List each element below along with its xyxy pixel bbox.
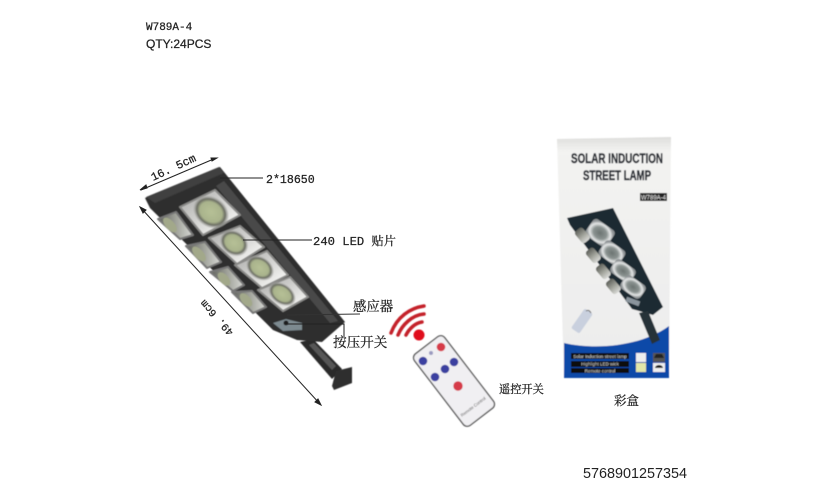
width dimension arrow [140, 158, 217, 190]
press switch label: 按压开关 [333, 334, 388, 350]
remote body [412, 334, 496, 428]
length dimension arrow [140, 207, 321, 405]
lamp body [145, 167, 345, 342]
remote buttons [419, 343, 463, 391]
box feature icons [636, 353, 665, 372]
lower lens row [158, 212, 266, 313]
box lamp picture [567, 208, 663, 344]
box face [557, 137, 671, 378]
packaging box [557, 137, 671, 378]
sensor leader line [287, 314, 360, 315]
box remote picture [571, 308, 593, 334]
remote control [412, 334, 496, 428]
main lens row [180, 189, 308, 311]
model number: W789A-4 [146, 22, 193, 34]
width label: 16. 5cm [149, 152, 199, 185]
LED label: 240 LED 贴片 [313, 233, 396, 249]
lamp mounting arm [300, 339, 352, 390]
box title: SOLAR INDUCTION [571, 151, 663, 166]
product: solar street lamp [145, 167, 352, 390]
remote brand text: Remote Control [460, 396, 487, 418]
box model tag [640, 193, 667, 202]
battery leader line [220, 177, 263, 179]
box feature list [571, 353, 629, 374]
press switch leader line [287, 324, 344, 337]
length label: 49. 6cm [199, 297, 237, 337]
box model tag: W789A-4 [641, 196, 667, 202]
box feature list: Solar Induction street lamp [573, 354, 627, 359]
colour box label: 彩盒 [614, 394, 639, 408]
barcode number: 5768901257354 [583, 466, 687, 482]
battery label: 2*18650 [266, 174, 315, 187]
remote switch label: 遥控开关 [499, 382, 544, 396]
box subtitle: STREET LAMP [583, 168, 651, 183]
box feature list: Highlight LED wick [581, 362, 620, 366]
box blue band [564, 326, 669, 378]
LED leader line [243, 239, 312, 241]
sensor panel [273, 319, 302, 331]
icon: wireless signal [391, 306, 424, 340]
box feature list: Remote control [585, 368, 615, 374]
quantity: QTY:24PCS [146, 37, 211, 51]
sensor label: 感应器 [353, 298, 394, 314]
